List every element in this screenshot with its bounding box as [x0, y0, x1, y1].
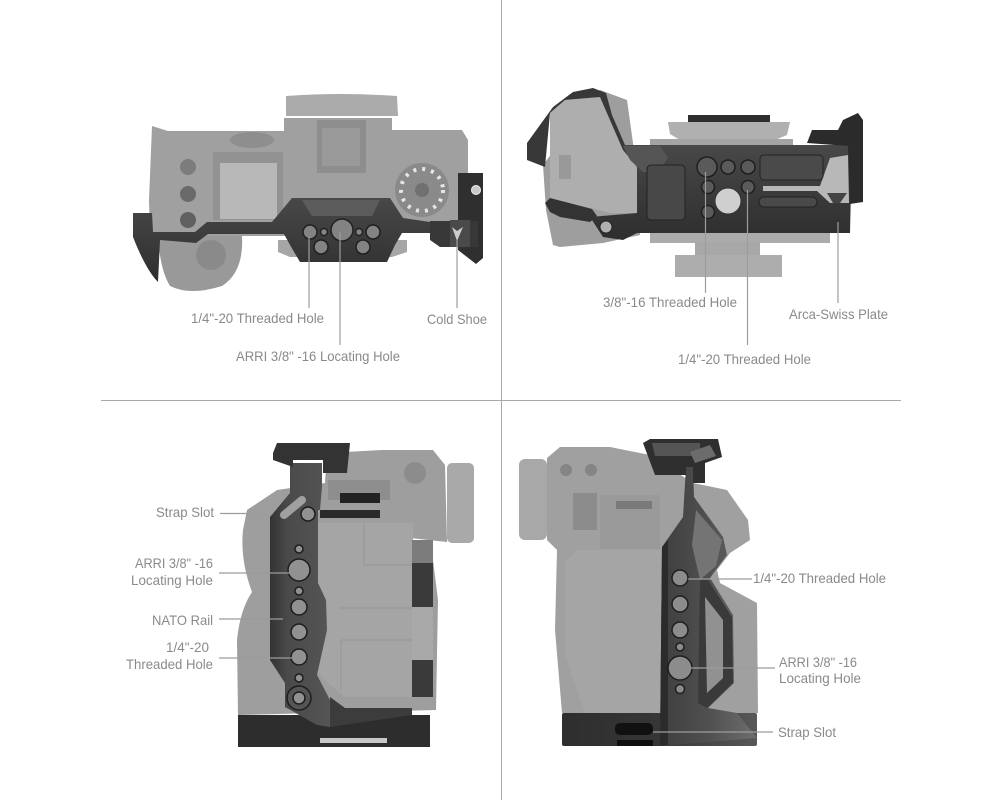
cold shoe [273, 443, 350, 473]
strap slot opening [284, 500, 302, 515]
grip highlight [692, 510, 722, 580]
cage base plate [238, 715, 430, 747]
cage bottom plate [590, 145, 852, 240]
label: strap slot: Strap Slot [778, 724, 836, 740]
base notch [617, 740, 653, 746]
label: threaded hole [126, 639, 292, 672]
cage top plate [133, 198, 432, 282]
panel: left side view [126, 443, 474, 747]
label: ARRI locating hole: Locating Hole [779, 670, 861, 686]
cage hand screw [600, 221, 612, 233]
label: ARRI locating hole [690, 654, 861, 686]
left grip wrap [527, 88, 637, 167]
label: cold shoe: Cold Shoe [427, 311, 487, 327]
base plate step [330, 697, 412, 727]
camera body top view [149, 94, 468, 291]
base plate [562, 713, 757, 746]
label: ARRI locating hole [131, 555, 290, 588]
plate slots [647, 155, 823, 220]
panel: top view [133, 94, 487, 364]
label: threaded hole: Threaded Hole [126, 656, 213, 672]
arca-swiss silver plate [763, 155, 849, 203]
right cage bracket [807, 113, 863, 204]
label: ARRI locating hole: Locating Hole [131, 572, 213, 588]
top plate holes [303, 219, 380, 254]
label: 3/8"-16 threaded hole: 3/8"-16 Threaded Hole [603, 294, 737, 310]
label: ARRI locating hole: ARRI 3/8" -16 [135, 555, 213, 571]
label: ARRI locating hole: ARRI 3/8" -16 Locating Hole [236, 348, 400, 364]
label: threaded hole: 1/4"-20 Threaded Hole [753, 570, 886, 586]
hand slot opening [705, 597, 723, 693]
hand slot frame [698, 580, 733, 708]
label: threaded hole: 1/4"-20 [166, 639, 209, 655]
label: 3/8"-16 threaded hole [603, 172, 737, 310]
tripod screw [715, 188, 741, 214]
plate notch [827, 193, 847, 203]
label: 1/4"-20 threaded hole: 1/4"-20 Threaded Hole [678, 351, 811, 367]
panel: bottom view [527, 88, 888, 367]
label: NATO rail: NATO Rail [152, 612, 213, 628]
lower grip strip [545, 198, 597, 222]
cage top plate inset [302, 200, 380, 216]
side rail holes [287, 507, 315, 710]
label: NATO rail [152, 612, 283, 628]
label: strap slot [156, 504, 273, 520]
cage pivot lobe [623, 146, 668, 172]
grip holes [668, 570, 692, 694]
vertical divider [500, 0, 502, 800]
camera body bottom view [543, 90, 830, 277]
camera body right side [519, 447, 758, 713]
cold shoe [643, 439, 722, 483]
label: ARRI locating hole: ARRI 3/8" -16 [779, 654, 857, 670]
label: cold shoe [427, 240, 487, 327]
cage handgrip [660, 467, 757, 746]
foot detail [340, 493, 380, 503]
panel: right side view [519, 439, 886, 746]
cage side rail [270, 463, 330, 727]
label: 1/4"-20 threaded hole [191, 237, 324, 326]
label: arca-swiss plate [789, 222, 888, 322]
grip dark edge [660, 540, 668, 746]
base strap slot [615, 723, 653, 735]
cold shoe [430, 173, 483, 264]
bottom plate holes [697, 157, 755, 218]
label: strap slot: Strap Slot [156, 504, 214, 520]
camera body left side [237, 450, 474, 715]
upper rail bar [320, 510, 380, 518]
label: arca-swiss plate: Arca-Swiss Plate [789, 306, 888, 322]
base plate highlight [320, 738, 387, 743]
label: 1/4"-20 threaded hole: 1/4"-20 Threaded Hole [191, 310, 324, 326]
horizontal divider [101, 400, 901, 402]
